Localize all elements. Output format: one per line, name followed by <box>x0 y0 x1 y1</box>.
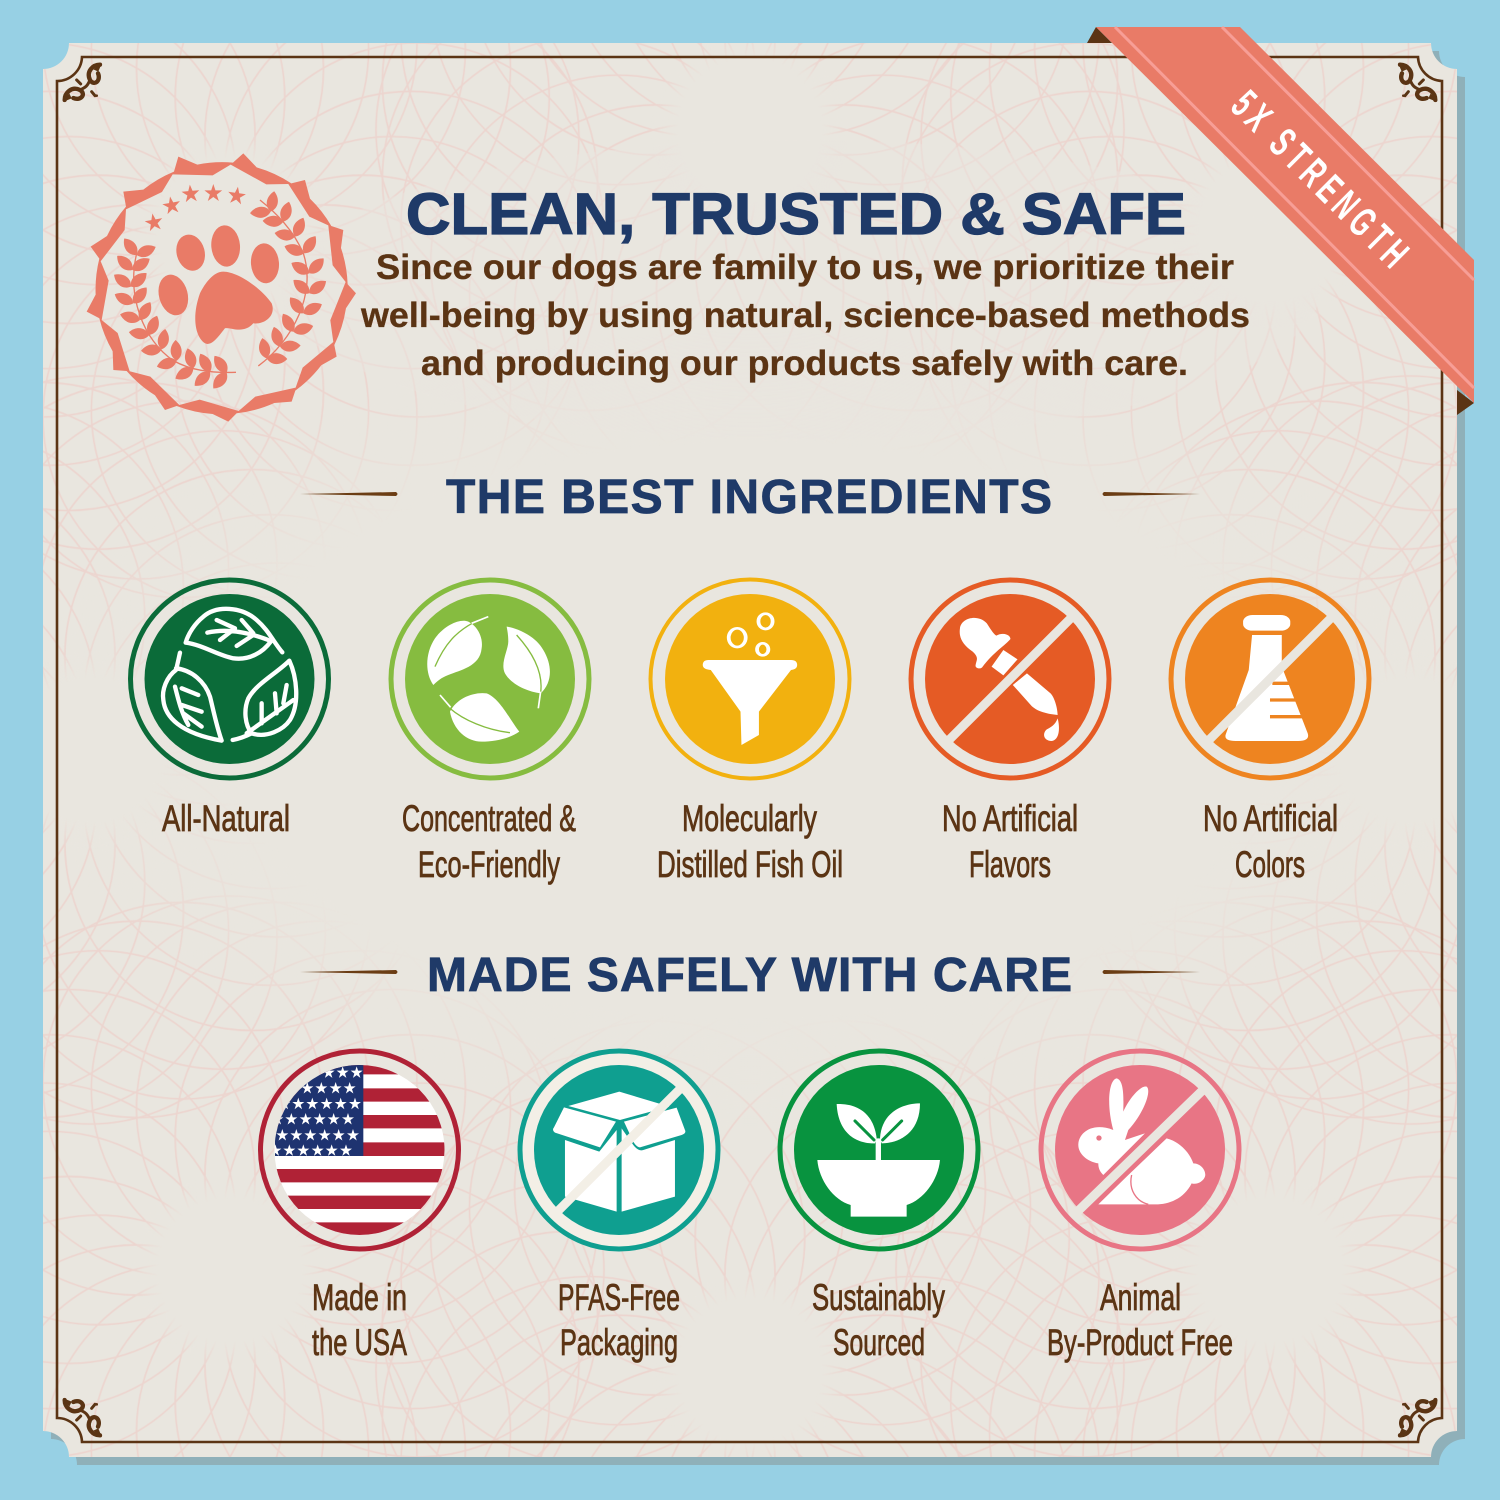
label: no artificial colors: Colors <box>1235 844 1305 885</box>
intro paragraph: Since our dogs are family to us, we prioritize their <box>376 248 1234 287</box>
label: no artificial colors: No Artificial <box>1203 798 1338 839</box>
label: all-natural: All-Natural <box>162 798 290 839</box>
title: CLEAN, TRUSTED & SAFE <box>406 182 1186 247</box>
icon: no artificial colors flask <box>1171 580 1369 778</box>
heading: the best ingredients <box>300 471 1200 524</box>
icon: made in the usa flag <box>260 1051 458 1249</box>
corner ornament top-left <box>63 63 102 102</box>
label: concentrated and eco-friendly: Eco-Friendly <box>418 844 560 885</box>
label: animal by-product free: Animal <box>1100 1277 1181 1318</box>
label: molecularly distilled fish oil: Distilled Fish Oil <box>657 844 843 885</box>
corner ornament bottom-left <box>63 1398 102 1437</box>
icon: molecularly distilled funnel <box>650 580 850 778</box>
intro paragraph: well-being by using natural, science-based methods <box>360 296 1250 335</box>
label: pfas-free packaging: Packaging <box>560 1322 678 1363</box>
corner ornament top-right <box>1398 63 1437 102</box>
label: no artificial colors <box>1203 798 1338 885</box>
heading: the best ingredients: THE BEST INGREDIENTS <box>446 471 1052 524</box>
label: animal by-product free: By-Product Free <box>1047 1322 1233 1363</box>
label: no artificial flavors: No Artificial <box>942 798 1078 839</box>
icon: no artificial flavors dropper <box>911 580 1109 778</box>
heading: made safely with care: MADE SAFELY WITH CARE <box>427 949 1072 1002</box>
label: molecularly distilled fish oil: Molecularly <box>682 798 817 839</box>
ribbon: 5X strength: 5X STRENGTH <box>1222 82 1420 281</box>
label: no artificial flavors <box>942 798 1078 885</box>
intro paragraph: and producing our products safely with care. <box>421 344 1188 383</box>
icon: paw seal badge <box>87 153 356 422</box>
label: pfas-free packaging: PFAS-Free <box>558 1277 680 1318</box>
ribbon: 5X strength <box>1087 27 1474 415</box>
label: animal by-product free <box>1047 1277 1233 1363</box>
icon: pfas-free packaging box <box>520 1051 718 1249</box>
label: pfas-free packaging <box>558 1277 680 1363</box>
corner ornament bottom-right <box>1398 1398 1437 1437</box>
label: molecularly distilled fish oil <box>657 798 843 885</box>
icon: sustainably sourced plant bowl <box>780 1051 978 1249</box>
icon: concentrated and eco-friendly <box>391 580 589 778</box>
label: made in the usa: Made in <box>312 1277 407 1318</box>
label: sustainably sourced <box>812 1277 945 1363</box>
label: made in the usa: the USA <box>312 1322 407 1363</box>
label: sustainably sourced: Sourced <box>833 1322 925 1363</box>
label: no artificial flavors: Flavors <box>969 844 1051 885</box>
label: made in the usa <box>312 1277 407 1363</box>
icon: animal by-product free rabbit <box>1041 1051 1239 1249</box>
icon: all-natural <box>130 580 328 778</box>
label: concentrated and eco-friendly: Concentrated & <box>402 798 576 839</box>
label: sustainably sourced: Sustainably <box>812 1277 945 1318</box>
label: concentrated and eco-friendly <box>402 798 576 885</box>
intro paragraph <box>360 248 1250 383</box>
